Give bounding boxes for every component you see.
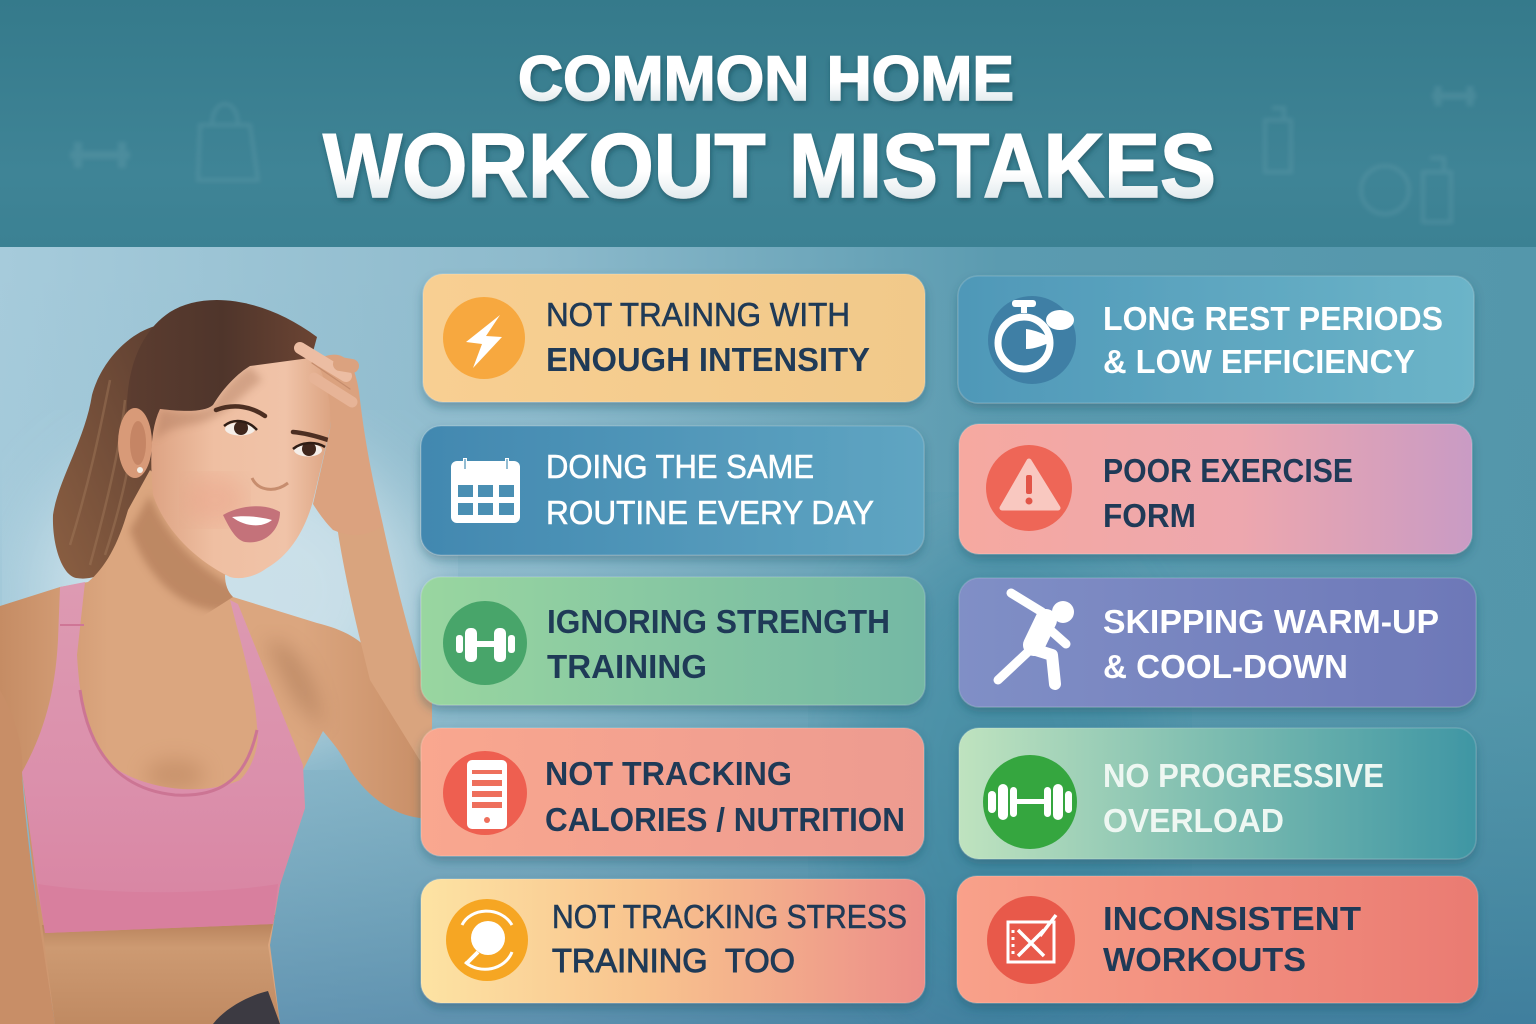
- head hair: [127, 300, 317, 460]
- neck shadow: [129, 497, 233, 612]
- card text: NOT TRACKING STRESS: [552, 898, 907, 935]
- eyebrows: [216, 406, 265, 416]
- icon: stress cycle: [446, 899, 528, 981]
- icon: calendar: [451, 458, 520, 523]
- icon: lightning bolt: [443, 297, 525, 379]
- card text: [1103, 603, 1439, 685]
- title: WORKOUT MISTAKES: [323, 116, 1216, 217]
- card text: [1103, 300, 1443, 380]
- body shading: [145, 640, 322, 791]
- card text: ROUTINE EVERY DAY: [546, 494, 874, 531]
- icon: barbell: [983, 755, 1077, 849]
- raised forearm: [337, 525, 432, 780]
- leggings waistband: [213, 991, 280, 1024]
- card text: [1103, 452, 1353, 534]
- card text: NO PROGRESSIVE: [1103, 757, 1384, 794]
- card text: FORM: [1103, 497, 1196, 534]
- card: not tracking stress: [421, 879, 925, 1003]
- card: doing the same routine: [421, 426, 924, 555]
- card text: [546, 296, 870, 378]
- card: no progressive overload: [959, 728, 1476, 859]
- left arm: [0, 690, 55, 1024]
- belly: [42, 915, 280, 1024]
- card text: [1103, 757, 1384, 839]
- card: poor exercise form: [959, 424, 1472, 554]
- card text: TRAINING TOO: [552, 942, 795, 979]
- woman illustration: [0, 300, 432, 1024]
- icon: warning triangle: [986, 445, 1072, 531]
- card text: DOING THE SAME: [546, 448, 814, 485]
- nose: [252, 478, 288, 489]
- header band: [0, 0, 1536, 247]
- ear: [118, 408, 152, 478]
- icon: crossed-out plan: [987, 896, 1075, 984]
- card: skipping warm-up: [959, 578, 1476, 707]
- face: [151, 357, 331, 578]
- pink sports top: [22, 582, 305, 933]
- card text: ENOUGH INTENSITY: [546, 341, 870, 378]
- card text: CALORIES / NUTRITION: [545, 801, 905, 838]
- card text: [1103, 900, 1361, 978]
- card text: NOT TRAINNG WITH: [546, 296, 850, 333]
- card text: SKIPPING WARM-UP: [1103, 603, 1439, 640]
- card: long rest periods: [958, 276, 1474, 403]
- card text: OVERLOAD: [1103, 802, 1284, 839]
- card: inconsistent workouts: [957, 876, 1478, 1003]
- icon: dumbbell: [443, 601, 527, 685]
- card: not tracking calories: [421, 728, 924, 856]
- card: ignoring strength training: [421, 577, 925, 705]
- card text: [546, 448, 874, 531]
- card text: IGNORING STRENGTH: [547, 603, 890, 640]
- card text: [545, 755, 905, 838]
- torso and shoulders: [0, 470, 432, 1024]
- card: not training with enough intensity: [423, 274, 925, 402]
- ponytail: [53, 326, 160, 579]
- card text: INCONSISTENT: [1103, 900, 1361, 937]
- faint header icons: [70, 86, 1476, 222]
- icon: stopwatch: [988, 296, 1076, 384]
- title: COMMON HOME: [518, 44, 1014, 114]
- hand on forehead: [300, 348, 383, 535]
- card text: WORKOUTS: [1103, 941, 1306, 978]
- card text: POOR EXERCISE: [1103, 452, 1353, 489]
- icon: runner: [998, 593, 1074, 684]
- card text: & LOW EFFICIENCY: [1103, 343, 1415, 380]
- card text: [552, 898, 907, 979]
- icon: phone tracker: [443, 751, 527, 835]
- card text: & COOL-DOWN: [1103, 648, 1348, 685]
- title: [323, 44, 1216, 217]
- card text: LONG REST PERIODS: [1103, 300, 1443, 337]
- background panel: [0, 247, 1536, 1024]
- card text: [547, 603, 890, 685]
- card text: NOT TRACKING: [545, 755, 792, 792]
- card text: TRAINING: [547, 648, 707, 685]
- mouth: [223, 506, 280, 542]
- eyes: [225, 422, 255, 436]
